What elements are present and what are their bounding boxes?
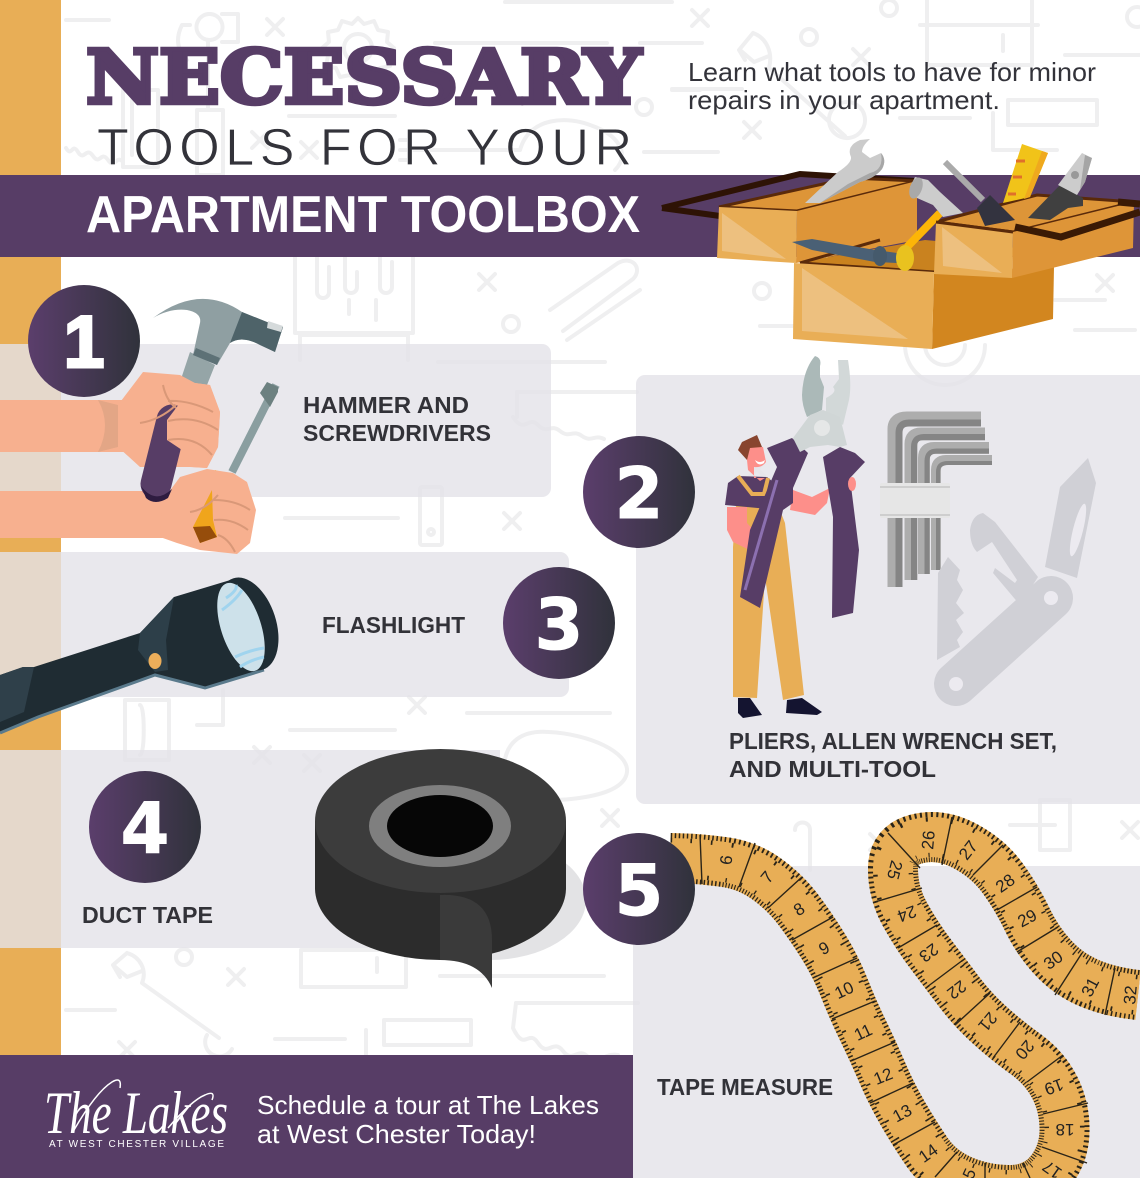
item 1: hammer and screwdriver in hands	[0, 299, 283, 554]
badge 4	[89, 771, 201, 883]
screwdriver shaft	[232, 385, 276, 472]
plier handles	[740, 438, 865, 618]
intro text: repairs in your apartment.	[688, 85, 1000, 115]
multi-tool	[937, 458, 1096, 691]
panel: pliers, allen wrench set and multi-tool	[636, 375, 1140, 804]
badge 1: 1	[64, 302, 104, 383]
hammer head	[153, 299, 283, 390]
call to action	[257, 1090, 599, 1149]
footer band	[0, 1055, 633, 1178]
tape measure numbers: 12	[871, 1064, 896, 1089]
right tray front	[934, 202, 1134, 278]
tape measure numbers: 23	[915, 939, 942, 966]
shirt	[725, 476, 783, 510]
tape measure numbers: 31	[1078, 974, 1103, 1000]
right open lid frame	[1015, 202, 1140, 237]
ruler	[1003, 144, 1048, 203]
tape side	[315, 821, 566, 960]
tape measure numbers: 8	[790, 899, 808, 920]
tape measure numbers: 29	[1014, 906, 1040, 931]
tape hole	[369, 785, 511, 867]
right arm	[790, 488, 830, 515]
tape measure numbers: 19	[1042, 1074, 1066, 1099]
hammer outline and gear outline	[178, 14, 238, 175]
hammer	[907, 176, 963, 247]
badge 4: 4	[121, 788, 169, 870]
allen wrench set	[880, 419, 992, 587]
tape loose end	[440, 895, 492, 988]
head	[738, 435, 766, 481]
item 5: tape measure	[670, 817, 1140, 1178]
ellipse, saw, wrench lower	[504, 732, 627, 800]
tape top	[315, 749, 566, 893]
overalls	[733, 478, 804, 700]
logo: The Lakes	[44, 1080, 228, 1146]
tape measure numbers: 13	[889, 1101, 915, 1126]
bottom box	[793, 240, 1054, 349]
left arm	[727, 507, 772, 559]
title: apartment toolbox: APARTMENT TOOLBOX	[86, 186, 640, 244]
toolbox illustration	[662, 139, 1140, 349]
call to action: at West Chester Today!	[257, 1119, 536, 1149]
item 2: worker with pliers	[725, 356, 865, 718]
call to action: Schedule a tour at The Lakes	[257, 1090, 599, 1120]
item 3: flashlight	[0, 570, 289, 733]
label: hammer and screwdrivers: SCREWDRIVERS	[303, 420, 491, 446]
arm and fist upper	[0, 372, 220, 502]
title block	[86, 35, 642, 244]
tape measure numbers: 22	[943, 976, 970, 1003]
panel: hammer and screwdrivers	[0, 344, 551, 497]
tape measure numbers: 27	[955, 837, 982, 864]
label: duct tape: DUCT TAPE	[82, 902, 213, 928]
label: pliers, allen wrench set, multi-tool: PLIERS, ALLEN WRENCH SET,	[729, 728, 1057, 754]
panel: duct tape	[0, 750, 500, 948]
badge 2: 2	[615, 453, 663, 535]
awl	[792, 239, 914, 271]
label: flashlight: FLASHLIGHT	[322, 612, 465, 638]
screwdriver	[945, 162, 1015, 226]
label: hammer and screwdrivers	[303, 392, 491, 446]
title: tools for your: TOOLS FOR YOUR	[97, 119, 632, 177]
panel: tape measure	[633, 866, 1140, 1178]
wrench upper	[739, 33, 865, 138]
label: pliers, allen wrench set, multi-tool	[729, 728, 1057, 782]
badge 2	[583, 436, 695, 548]
badge 3	[503, 567, 615, 679]
pliers	[1028, 153, 1092, 220]
shoes	[738, 698, 822, 718]
toolbox outline	[920, 0, 1097, 150]
label: pliers, allen wrench set, multi-tool: AND MULTI-TOOL	[729, 756, 936, 782]
badge 3: 3	[535, 584, 583, 666]
tape shadow	[394, 840, 586, 960]
logo: AT WEST CHESTER VILLAGE	[49, 1139, 224, 1150]
tape measure numbers: 14	[915, 1140, 941, 1167]
left accent strip	[0, 0, 61, 1178]
tape measure numbers: 18	[1056, 1120, 1074, 1139]
tape measure numbers: 11	[851, 1020, 875, 1045]
label: hammer and screwdrivers: HAMMER AND	[303, 392, 469, 418]
left tray	[717, 178, 917, 263]
tape measure numbers: 10	[832, 978, 857, 1003]
intro text: Learn what tools to have for minor	[688, 57, 1096, 87]
hand	[848, 477, 856, 491]
tape measure numbers: 6	[716, 854, 737, 866]
tape measure numbers: 26	[918, 830, 939, 850]
label: tape measure: TAPE MEASURE	[657, 1074, 833, 1100]
title: necessary: NECESSARY	[86, 35, 642, 121]
tape measure segment lines	[700, 817, 1115, 1178]
paint shape	[295, 257, 413, 360]
straps	[738, 476, 768, 494]
tape measure numbers: 30	[1040, 947, 1066, 974]
band	[880, 483, 950, 518]
tape measure numbers: 28	[992, 870, 1018, 897]
tape measure numbers: 25	[883, 858, 906, 881]
right tray interior	[936, 195, 1134, 232]
flashlight button	[148, 653, 162, 669]
tape measure numbers: 9	[816, 938, 833, 959]
tape measure numbers: 20	[1011, 1036, 1038, 1063]
plier jaws	[793, 356, 850, 452]
wrench	[805, 139, 884, 203]
panel: flashlight	[0, 552, 569, 697]
left open lid frame	[662, 174, 915, 216]
tape measure numbers: 24	[895, 901, 919, 926]
tape measure numbers: 21	[974, 1008, 1001, 1035]
badge 5: 5	[615, 850, 663, 932]
item 4: duct tape roll	[315, 749, 586, 988]
intro text	[688, 57, 1096, 115]
header band	[0, 175, 1140, 257]
badge 5	[583, 833, 695, 945]
tape measure numbers: 7	[757, 868, 778, 887]
badge 1	[28, 285, 140, 397]
tape measure numbers	[716, 830, 1140, 1178]
arm and fist lower	[0, 469, 256, 554]
